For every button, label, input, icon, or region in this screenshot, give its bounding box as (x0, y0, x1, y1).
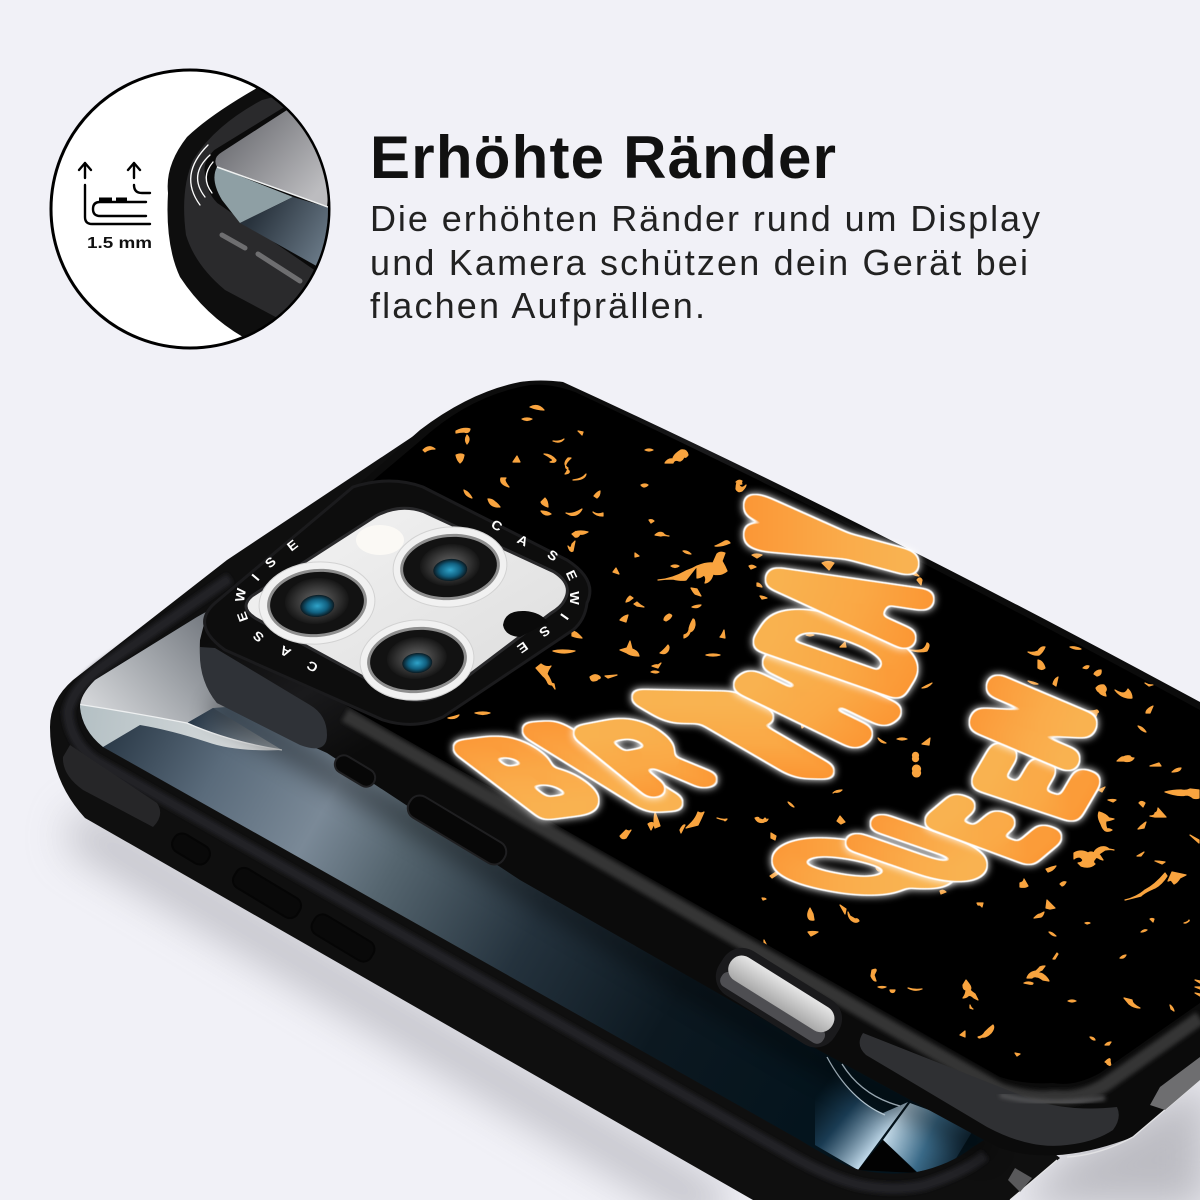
lettering: QUEEN: E (899, 787, 1087, 873)
ring lettering: CASEWISE: E (284, 537, 301, 554)
label: 1.5 mm: 1.5 mm (87, 235, 152, 252)
screen wallpaper fans (815, 1080, 908, 1170)
flash (356, 525, 404, 555)
ring lettering: CASEWISE: W (233, 587, 249, 603)
lettering: QUEEN: Q (729, 827, 961, 906)
bumper inner lip (345, 715, 1200, 1098)
orange speckle pattern (423, 406, 1200, 1066)
ring lettering: CASEWISE: E (515, 639, 531, 656)
lettering: QUEEN: E (948, 736, 1124, 830)
charging port (707, 940, 850, 1056)
lettering: BIRTHDAY (422, 491, 968, 835)
back phone inner lip (68, 578, 985, 1188)
back phone (50, 425, 1060, 1200)
lettering: BIRTHDAY: I (495, 710, 712, 824)
body text: Die erhöhten Ränder rund um Display (370, 198, 1040, 239)
front phone bumper (200, 380, 1200, 1155)
microphone hole (503, 611, 548, 637)
inset circle: raised edge detail (51, 60, 340, 360)
ring lettering: CASEWISE: I (249, 571, 262, 584)
black back panel (340, 385, 1200, 1084)
icon: impact arcs (191, 145, 213, 205)
camera island (205, 481, 590, 724)
ring lettering: CASEWISE: I (557, 611, 571, 622)
front phone side buttons (332, 752, 510, 869)
lettering: BIRTHDAY: R (547, 702, 740, 811)
ring lettering: CASEWISE: E (563, 568, 580, 583)
back phone bumper (50, 425, 1060, 1200)
ground shadow (75, 825, 1200, 1200)
lettering: BIRTHDAY: Y (718, 491, 946, 593)
ring lettering: CASEWISE: E (234, 610, 251, 624)
ring lettering: CASEWISE: A (515, 532, 531, 549)
body text: flachen Aufprällen. (370, 285, 705, 326)
back phone corner grip (63, 745, 160, 827)
lettering: BIRTHDAY: T (614, 681, 887, 789)
lens (390, 522, 510, 612)
lettering: BIRTHDAY: B (422, 719, 639, 835)
ring lettering: CASEWISE: A (277, 643, 293, 660)
lettering: QUEEN: U (817, 807, 1023, 894)
lettering: BIRTHDAY: A (723, 544, 968, 654)
back phone screen (80, 612, 984, 1174)
lettering: BIRTHDAY: D (716, 587, 965, 712)
ring lettering: CASEWISE: S (250, 628, 267, 645)
inset photo: phone corner (168, 88, 328, 336)
back phone side buttons (169, 830, 378, 965)
ring lettering: CASEWISE: C (489, 517, 505, 534)
left grip (200, 647, 327, 748)
lens (256, 557, 378, 649)
shadow under front phone (215, 705, 990, 1150)
camera glass (248, 510, 566, 699)
ring lettering: CASEWISE (233, 517, 581, 675)
camera ring (205, 481, 590, 724)
lettering: QUEEN: N (947, 665, 1119, 781)
bumper corner grip (860, 1033, 1119, 1146)
lettering: BIRTHDAY: H (707, 638, 928, 758)
ring lettering: CASEWISE: W (567, 591, 581, 605)
heading: Erhöhte Ränder (370, 124, 836, 191)
ring lettering: CASEWISE: S (537, 623, 553, 640)
ring lettering: CASEWISE: S (262, 554, 279, 571)
front phone (200, 380, 1200, 1157)
icon: raised edge diagram (79, 163, 150, 224)
lettering: QUEEN (729, 665, 1124, 906)
ring lettering: CASEWISE: S (545, 547, 561, 564)
ring lettering: CASEWISE: C (304, 658, 320, 675)
body text: und Kamera schützen dein Gerät bei (370, 242, 1028, 283)
body text (370, 198, 1040, 326)
lens (357, 615, 477, 705)
